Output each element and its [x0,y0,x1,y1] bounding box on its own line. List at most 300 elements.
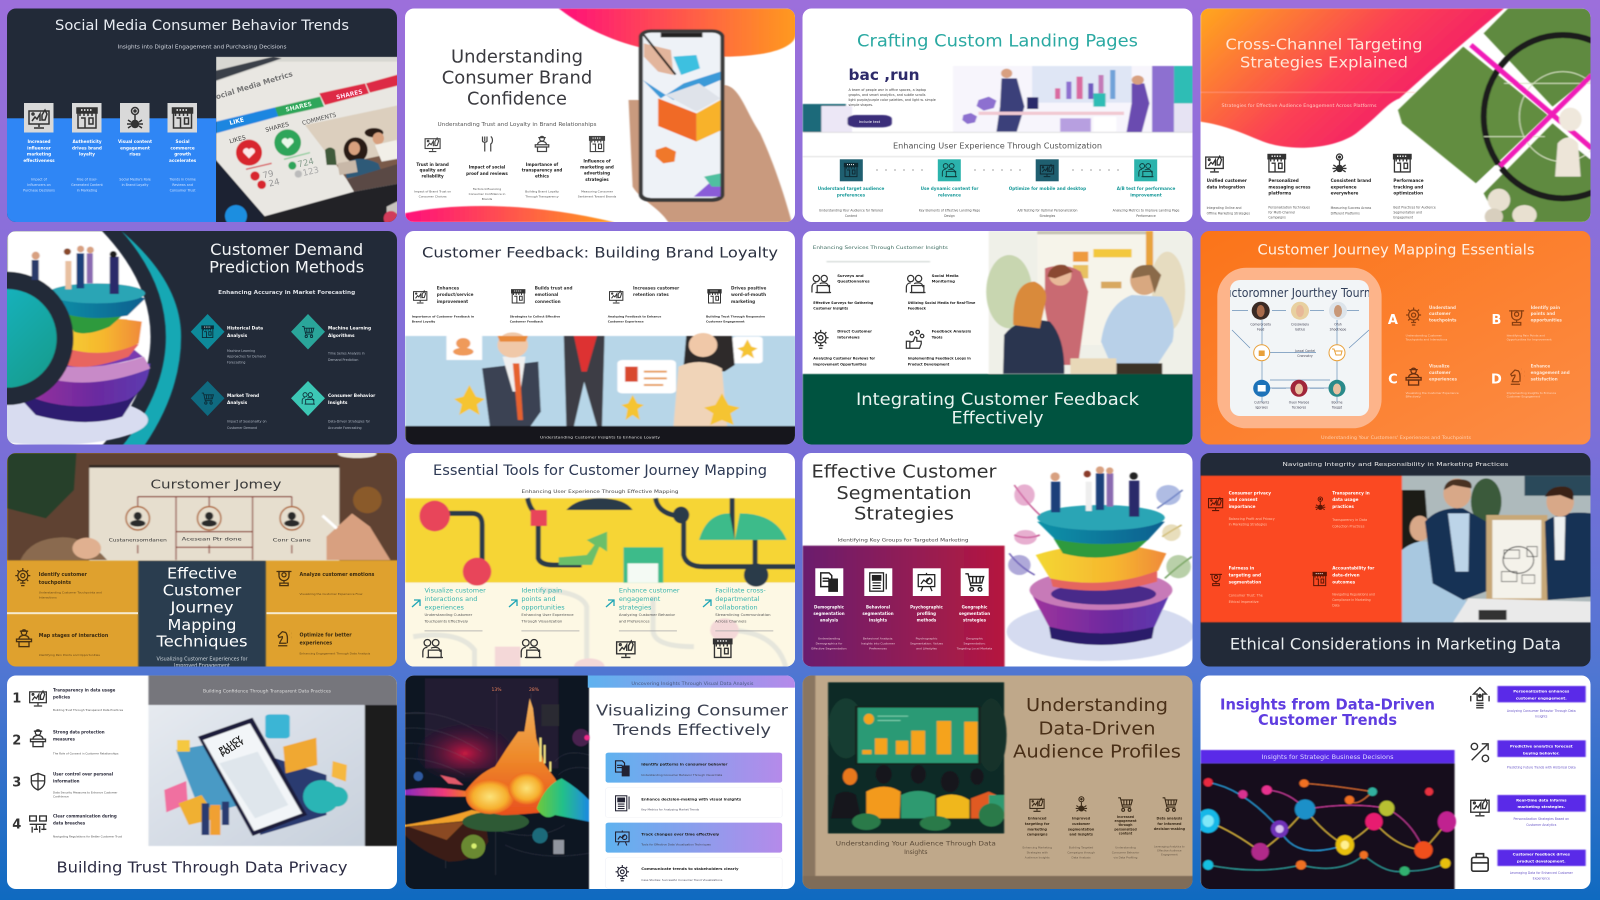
letter C: C [1388,372,1398,387]
item: social monitoring [906,273,976,311]
item: pain points [509,586,579,657]
label: data-driven [1332,572,1360,577]
item: visualize [412,586,486,657]
icon: diamond cart [291,314,325,350]
description: Touchpoints Effectively [424,618,469,624]
journey diagram image: Crosswisely [1291,322,1309,326]
dashboard labels: SHARES [285,101,313,114]
item: marketing influence [578,136,617,199]
item: surveys [812,273,874,311]
label: campaigns [1027,833,1047,837]
description: Approaches for Demand [227,355,266,359]
item: behavioral [861,568,896,651]
illustration: segmentation funnel [803,466,1195,668]
icon: monitor [414,291,427,303]
row dividers [7,612,398,614]
label: Understand [1429,305,1456,310]
title [209,240,364,276]
footer caption: Understanding Customer Insights to Enhance Loyalty [540,434,661,439]
description: Forecasting [227,360,245,364]
label: Personalization enhances [1513,689,1570,694]
icon: pin [1315,497,1325,510]
journey diagram image: Comerorosity [1250,322,1271,326]
description: Interactions [39,596,57,600]
label: segmentation [1068,827,1095,831]
description: Understanding Customer [1406,333,1443,337]
label: product/service [437,292,474,297]
label: engagement [1115,819,1137,823]
label: Trust in brand [416,162,449,167]
label: targeting and [1229,572,1261,577]
icon: pin [1332,154,1346,172]
item D: engagement [1491,364,1570,399]
label: analysis [820,618,839,622]
number: 2 [12,733,21,748]
panel: Understanding Data-Driven Audience Profiles [802,675,1194,890]
label: product development. [1517,858,1566,863]
description: Data Security Measures to Enhance Customer [53,790,118,794]
icon: store [1268,154,1286,172]
icon tile: pin [120,103,150,132]
label: methods [917,618,937,622]
icon: team [521,640,541,657]
description: Analyzing Customer Behavior [619,612,676,617]
label: Personalized [1268,178,1299,183]
label: profiling [917,611,936,616]
item: machine learning [291,314,371,362]
title [1226,35,1422,72]
item: unified data [1206,156,1250,215]
hero paragraph: A team of people wor in office spaces, a laptop [848,88,926,92]
label: points and [521,595,556,603]
label: Use dynamic content for [921,186,979,191]
chart value labels: 13% [491,687,502,693]
title: Customer Feedback: Building Brand Loyalty [422,245,778,261]
description: Brands [482,197,493,201]
item: retention [608,286,680,324]
item: influencer marketing [23,103,55,192]
item: personalized messaging [1268,154,1311,220]
description: Segmentation: Values [910,642,943,646]
icon tile: document [815,568,843,596]
label: connection [535,299,561,304]
icon: thumb [906,330,924,348]
label: Demographic [814,604,845,610]
title: Effectively [952,408,1044,427]
description: Measuring Success Across [1331,206,1372,210]
item: performance tracking [1393,154,1436,220]
description: Balancing Profit and Privacy [1229,517,1275,521]
row: identify patterns [616,761,727,777]
icon: store [714,639,732,657]
band heading: Insights for Strategic Business Decisions [1262,753,1394,761]
label: data usage [1332,497,1359,502]
description: in Brand Loyalty [122,183,148,187]
phone screen heading: POLICY [219,738,246,759]
panel: Ethical Considerations in Marketing Data [1200,453,1592,667]
journey diagram image: Igpraies [1256,406,1268,410]
description: Purchase Decisions [23,188,55,192]
title: Understanding [451,48,583,68]
item A: touchpoints [1388,305,1457,342]
journey diagram image: Toegpt [1331,406,1343,410]
dashboard labels: 24 [268,177,281,190]
icon: monitor [1206,156,1223,172]
label: experiences [424,604,465,612]
subtitle: Improved Engagement [174,663,230,669]
title [812,462,997,524]
item: trust connection [510,286,572,324]
label: opportunities [1531,318,1562,323]
label: strategies [619,604,652,612]
label: Tools [932,334,943,339]
panel: Crafting Custom Landing Pages [802,8,1193,222]
label: loyalty [79,152,95,157]
item: consumer behavior [291,381,376,430]
item: touchpoints [15,568,102,600]
label: Algorithms [328,333,355,339]
description: Building Trust Through Transparent Data Practices [53,708,124,712]
description: Machine Learning [227,349,255,353]
icon: trophy [276,571,292,586]
label: everywhere [1331,191,1359,196]
label: and consent [1229,497,1258,502]
illustration: policy phone [148,675,397,846]
label: Identify pain [521,586,562,594]
item 3: user control [12,771,118,798]
description: Segmentation: [963,642,986,646]
description: Behavioral Analysis: [863,636,893,640]
label: engagement [619,595,661,603]
label: Fairness in [1229,566,1254,571]
dashboard labels: SHARES [336,88,363,101]
label: buying behavior. [1523,750,1560,755]
item: interviews [813,329,875,366]
panel: Understanding Consumer Brand Confidence [405,8,796,222]
journey diagram image: Ofuh [1334,322,1342,326]
description: in Marketing Strategies [1229,522,1267,526]
icon: monitor [610,291,623,303]
title: Mapping [168,616,236,634]
icon: diamond store [191,314,224,350]
illustration: glowing data network [1197,686,1586,890]
journey diagram image: Bourne [1331,400,1343,404]
map labels: Custanensomdanen [109,538,167,544]
description: Strategies to Collect Effective [510,314,560,318]
letter B: B [1491,313,1501,328]
subtitle [836,840,996,856]
hero paragraph: light purple/purple color palettes, and light w. simple [848,98,936,102]
description: Across Channels [715,618,746,624]
journey diagram image: Feed [1257,328,1264,332]
icon tile: storefront monitor [168,103,197,132]
chart value labels: 28% [529,687,540,693]
description: Analyzing Customer Reviews for [813,357,875,361]
label: reliability [422,174,444,179]
item: trust [414,138,451,199]
icon: monitor [30,691,46,706]
item: A/B test [1113,159,1180,218]
description: Data-Driven Strategies for [328,420,371,424]
title: Ethical Considerations in Marketing Data [1230,634,1561,653]
item: accountability [1313,566,1375,608]
description: Effectively [1406,395,1421,399]
label: Market Trend [227,393,259,399]
description: Time Series Analysis in [327,351,365,355]
item: personalization [1471,688,1576,719]
label: personalized [1114,827,1137,831]
description: Impact of Brand Trust on [414,190,451,194]
item: social commerce [168,103,197,192]
description: Experience [1533,876,1550,880]
description: Improvement Opportunities [813,362,867,366]
icon: trophy [1509,311,1524,325]
label: Surveys and [837,273,864,278]
icon: document [616,761,629,776]
journey diagram image: Iostius [1295,328,1305,332]
hero paragraph: simple shapes. [848,103,873,107]
label: Consumer Behavior [328,393,376,399]
subtitle: Insights [904,849,928,856]
label: growth [174,152,191,157]
title: Audience Profiles [1013,741,1181,762]
icon: lectern [16,630,32,647]
description: Collection Practices [1332,524,1365,528]
description: Campaigns through [1067,850,1095,854]
title [596,702,789,739]
item 4: breach communication [12,813,123,839]
illustration: yellow roadmap pipes [405,498,796,675]
description: Leveraging Analytics to [1154,844,1185,848]
label: Builds trust and [535,286,572,290]
item: word of mouth [706,286,766,324]
description: Personalization Strategies Based on [1514,817,1569,821]
description: Accurate Forecasting [328,426,362,430]
label: Direct Customer [837,329,872,334]
item: customer feedback [1472,852,1574,880]
description: Strategies with [1027,850,1048,854]
description: Understanding [1115,845,1136,849]
label: A/B test for performance [1117,186,1175,191]
title: Trends Effectively [612,721,771,739]
description: and Lifestyles [916,647,937,651]
description: Analyzing Feedback to Enhance [608,314,661,318]
item: historical data [191,314,266,364]
item: transparency [522,136,562,199]
description: and Preferences [619,618,650,624]
description: Through Transparency [524,195,559,199]
panel: Effective Customer Journey Mapping Techniques [7,450,398,669]
icon: diamond cart [191,381,224,416]
item: predictive analytics [1471,743,1576,770]
label: touchpoints [39,580,71,586]
icon tile: monitor [24,103,54,132]
description: Navigating Regulations for Better Customer Trust [53,835,123,839]
description: Understanding [818,636,840,640]
title: Building Trust Through Data Privacy [56,859,348,877]
label: Influence of [583,159,611,164]
item B: pain points [1491,305,1562,342]
dashboard labels: 724 [297,157,316,170]
label: Identify patterns in consumer behavior [641,761,727,766]
description: Performance [1136,214,1156,218]
icon: shield [31,773,45,790]
title [856,390,1139,427]
arrow [703,600,711,607]
label: touchpoints [1429,318,1457,323]
label: User control over personal [53,771,114,776]
item: authenticity [71,103,104,192]
icon: lectern [535,136,549,152]
panel: Customer Journey Mapping Essentials [1200,231,1590,445]
row: decision-making [616,796,742,812]
description: Geographic [966,636,983,640]
title: Effective Customer [812,462,997,482]
description: Different Platforms [1331,211,1360,215]
description: Consumer Behavior [1112,850,1140,854]
item: consistent experience [1331,154,1372,215]
label: Monitoring [932,279,955,284]
label: Visual content [118,139,152,144]
description: Enhancing User Experience [521,612,574,617]
label: Social [176,139,190,144]
item: privacy [1209,490,1275,526]
label: messaging across [1268,184,1311,189]
illustration: content rows and top bar [588,675,795,888]
chart value labels [491,687,540,693]
label: quality and [420,168,446,173]
icon: blocks [30,816,46,833]
description: Key Elements of Effective Landing Page [919,209,980,213]
icon: store [1313,572,1326,586]
description: Consumer Trust [170,188,196,192]
label: word-of-mouth [731,292,766,297]
item 2: protection [12,729,119,755]
panel: Insights from Data-Driven Customer Trends [1197,676,1590,890]
description: Measuring Consumer [581,190,614,194]
label: Analysis [227,333,248,339]
letter D: D [1491,372,1502,387]
title: Understanding [1026,695,1168,716]
description: Enhancing Engagement Through Data Analysis [300,652,371,656]
title: Strategies [854,504,954,524]
description: Social Media's Role [119,177,151,181]
label: transparency and [522,168,562,173]
description: Implementing Insights to Enhance [1507,391,1556,395]
title: Customer Trends [1258,711,1397,729]
label: platforms [1268,191,1292,196]
description: Factors Influencing [473,187,501,191]
icon: monitor [617,641,635,657]
subtitle: Building Confidence Through Transparent Data Practices [203,688,332,694]
label: Clear communication during [53,813,117,818]
number: 3 [12,775,21,790]
panel: Building Trust Through Data Privacy [7,675,397,890]
item: engagement [606,586,680,657]
label: targeting for [1025,822,1050,826]
title: Segmentation [836,484,972,504]
icon: pin [1076,797,1087,811]
description: Rise of User- [77,177,98,181]
subtitle: Enhancing Accuracy in Market Forecasting [218,290,356,296]
label: Improved [1072,817,1091,821]
subtitle: Uncovering Insights Through Visual Data Analysis [631,681,754,687]
icon: gear head [813,330,829,348]
label: Interviews [837,334,860,339]
description: Identifying Pain Points and Opportunities [39,653,100,657]
description: Insights into Customer [861,642,896,646]
description: Offline Marketing Strategies [1207,211,1250,215]
number: 1 [12,692,21,707]
hero paragraph: graphs, and smart analytics, and subtle scrolls [848,93,926,97]
label: decision-making [1154,827,1186,831]
photo: social media metrics dashboard [215,57,400,227]
row: communicate [616,865,739,882]
label: segmentation [813,611,845,616]
description: Demographics for [816,642,843,646]
subtitle: Insights into Digital Engagement and Purchasing Decisions [118,44,287,50]
icon: team [906,275,926,293]
icon: gear head [1406,308,1421,325]
subtitle: Navigating Integrity and Responsibility in Marketing Practices [1282,462,1509,468]
label: Enhance customer [619,586,680,594]
journey diagram image [1217,268,1382,428]
panel: Essential Tools for Customer Journey Mapping [405,453,796,675]
description: Engagement [1393,216,1414,220]
subtitle: Understanding Trust and Loyalty in Brand Relationships [438,122,597,128]
label: influencer [27,145,52,150]
item: product improvement [412,286,474,324]
item: targeting [1022,799,1052,859]
title: Integrating Customer Feedback [856,390,1139,409]
description: Understanding Customer Touchpoints and [39,591,102,595]
description: Personalization Techniques [1268,205,1310,209]
label: strategies [585,177,609,182]
icon: briefcase [1472,854,1488,871]
icon tile: store [72,103,102,132]
label: accelerates [169,158,197,163]
label: commerce [170,145,195,150]
label: points and [1531,311,1555,316]
dashboard labels: 79 [262,169,275,181]
description: Consumer Choices [419,195,447,199]
description: Data [1332,604,1340,608]
description: Opportunities for Improvement [1507,338,1552,342]
label: Analysis [227,400,248,406]
label: retention rates [633,292,669,297]
illustration: gradient shapes and phone in hand [405,8,796,222]
icon: cutlery [482,136,492,152]
description: Enhancing Marketing [1022,845,1052,849]
description: Touchpoints and Interactions [1405,338,1448,342]
label: Visualize [1429,364,1450,369]
icon: monitor [1471,799,1489,816]
label: Identify customer [39,572,87,578]
description: Consumer Confidence in [469,192,505,196]
row: track changes [616,830,720,847]
label: Geographic [962,604,988,610]
label: marketing strategies. [1518,804,1566,809]
label: tracking and [1393,184,1423,189]
label: and insights [1069,833,1093,837]
description: Implementing Feedback Loops in [908,357,971,361]
title: Effective [167,564,237,582]
description: Brand Loyalty [412,320,435,324]
label: Feedback Analysis [932,329,972,334]
description: Targeting Local Markets [956,647,993,651]
icon: notebook [616,796,629,811]
icon: lectern [30,730,46,747]
